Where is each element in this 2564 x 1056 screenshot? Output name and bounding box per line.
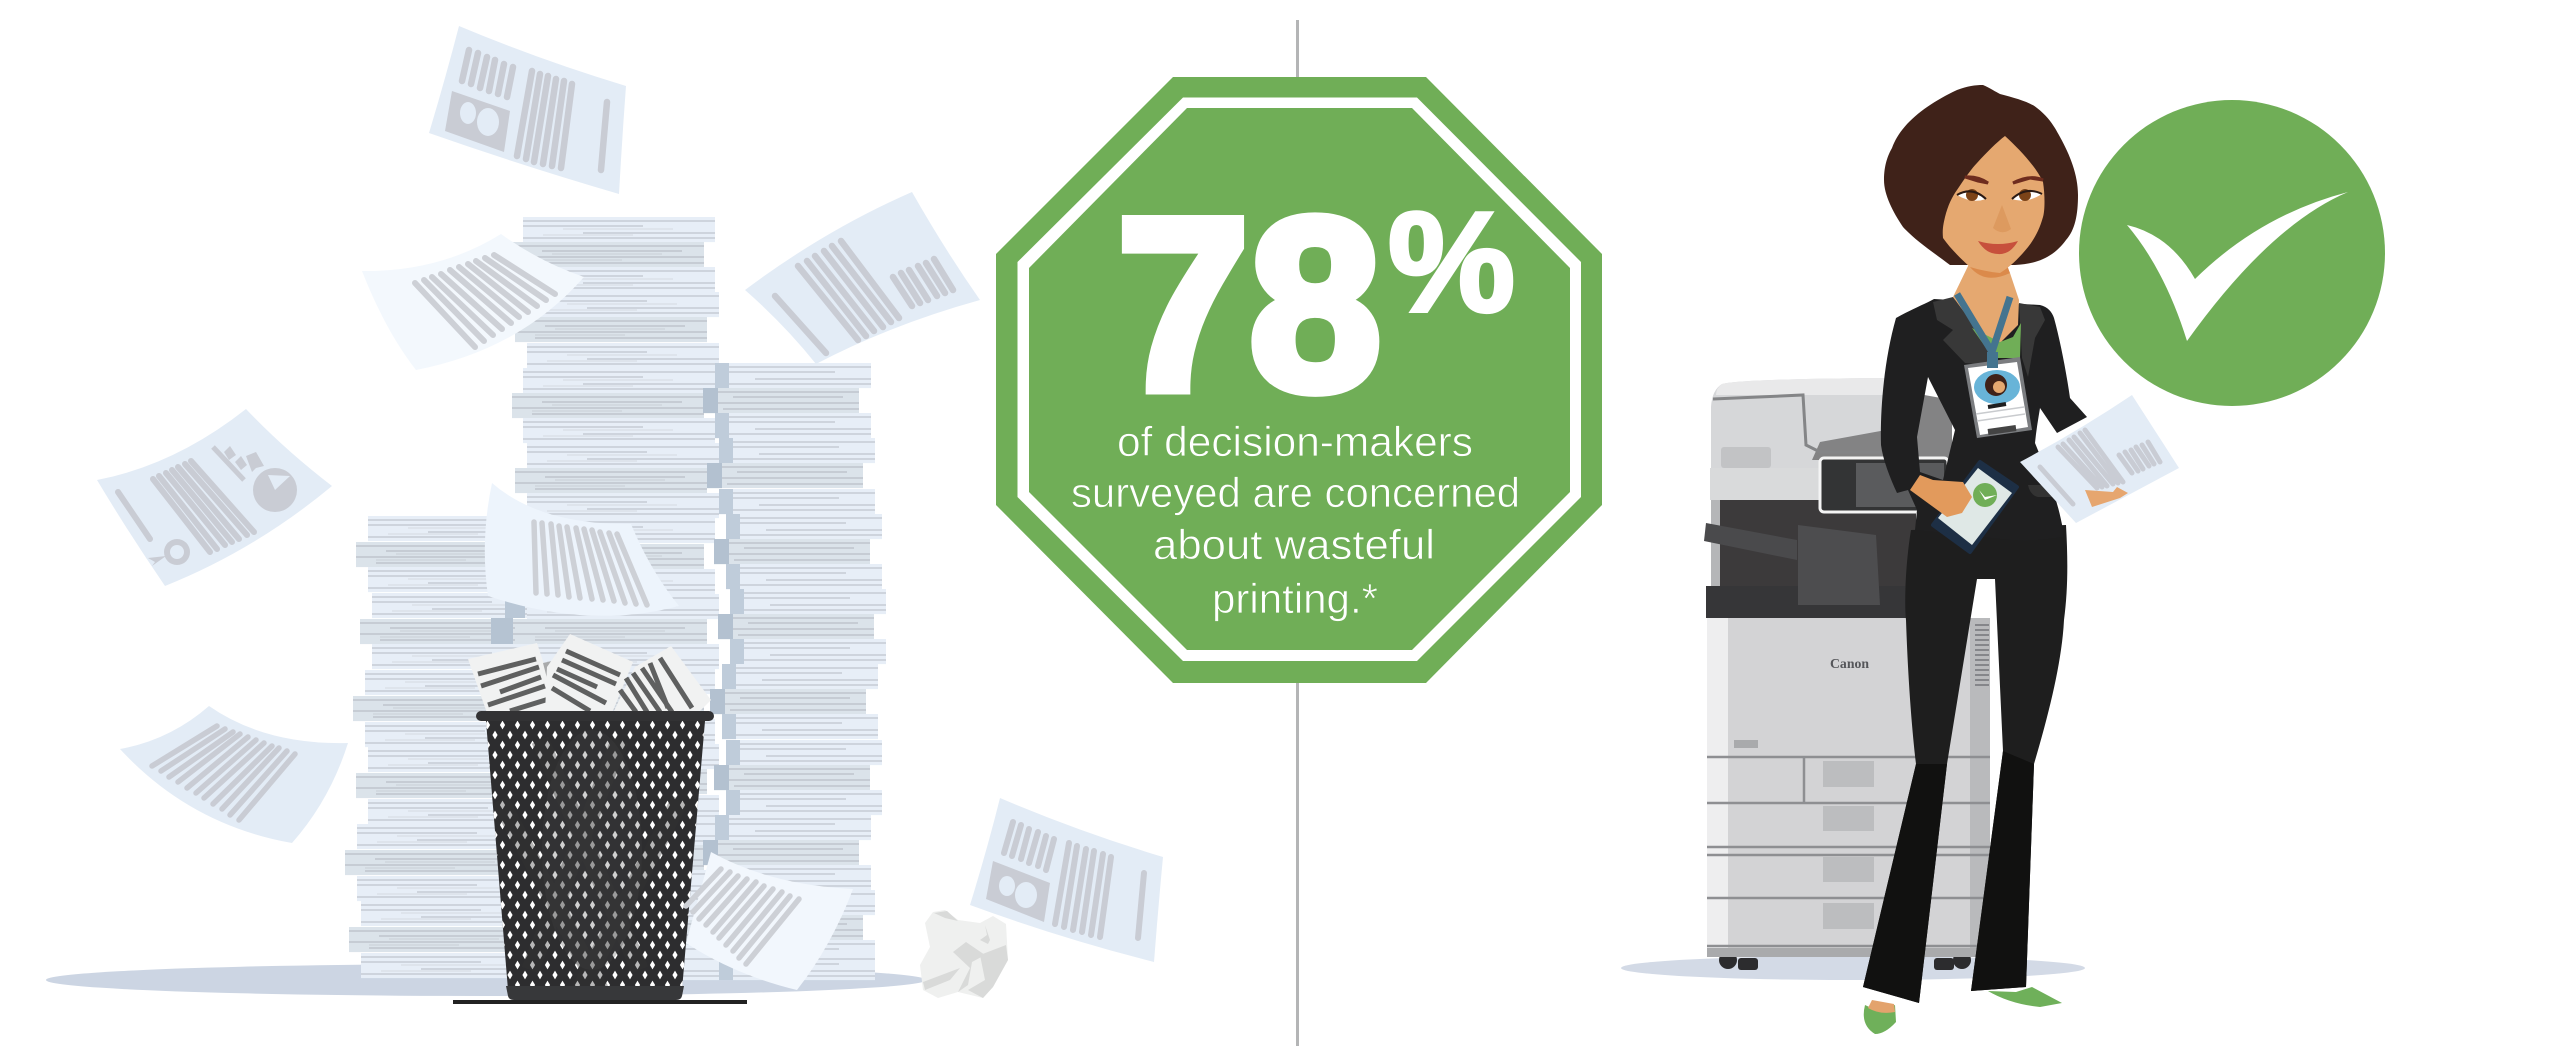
printer brand: Canon [1830, 657, 1869, 672]
multifunction printer [1704, 378, 1990, 970]
white tick [2127, 192, 2348, 341]
jacket [1881, 299, 2087, 541]
waste papers in bin [468, 634, 711, 713]
paper stack: middle [512, 217, 719, 980]
woman in black suit [1863, 85, 2179, 1034]
green octagon badge [996, 77, 1602, 683]
printer feet [1719, 951, 1971, 970]
statistic description: of decision-makers [1117, 418, 1473, 465]
statistic description: surveyed are concerned [1071, 469, 1520, 516]
ID badge [1964, 352, 2032, 438]
statistic description: about wasteful [1153, 521, 1435, 568]
face [1943, 136, 2044, 273]
floor shadow left [46, 964, 926, 996]
neck and chest [1953, 262, 2019, 350]
floating paper: left with charts [97, 409, 332, 586]
pocket [2028, 485, 2053, 497]
green check circle [2079, 100, 2385, 406]
paper stack: right [703, 363, 886, 980]
left hand [1910, 475, 1972, 517]
percent sign: % [1388, 183, 1515, 342]
lanyard [1957, 294, 2010, 352]
trouser cuffs [1863, 751, 2034, 1003]
floating paper: far right with photo [970, 798, 1163, 962]
floating paper: upper right [745, 192, 980, 364]
trousers [1863, 525, 2067, 1003]
statistic description [1071, 418, 1520, 622]
paper stack: left [345, 516, 564, 978]
crumpled paper ball [920, 910, 1008, 998]
centre divider line [1296, 20, 1299, 1046]
floating paper: middle over stack [485, 483, 679, 616]
shoes [1864, 987, 2062, 1034]
smartphone [1933, 462, 2017, 552]
floating paper: bottom right of bin [686, 852, 853, 990]
wire mesh waste bin [453, 711, 747, 1004]
floor shadow right [1621, 956, 2085, 980]
floating paper: top with photo [429, 26, 626, 194]
floating paper: curved white upper-left [362, 234, 584, 370]
jacket lapels [1933, 297, 2045, 377]
statistic 78: 78 [1117, 169, 1381, 442]
hair [1884, 85, 2078, 265]
held document [2020, 395, 2179, 523]
statistic description: printing.* [1212, 575, 1378, 622]
floating paper: lower left [120, 706, 348, 843]
green top [1972, 323, 2021, 358]
